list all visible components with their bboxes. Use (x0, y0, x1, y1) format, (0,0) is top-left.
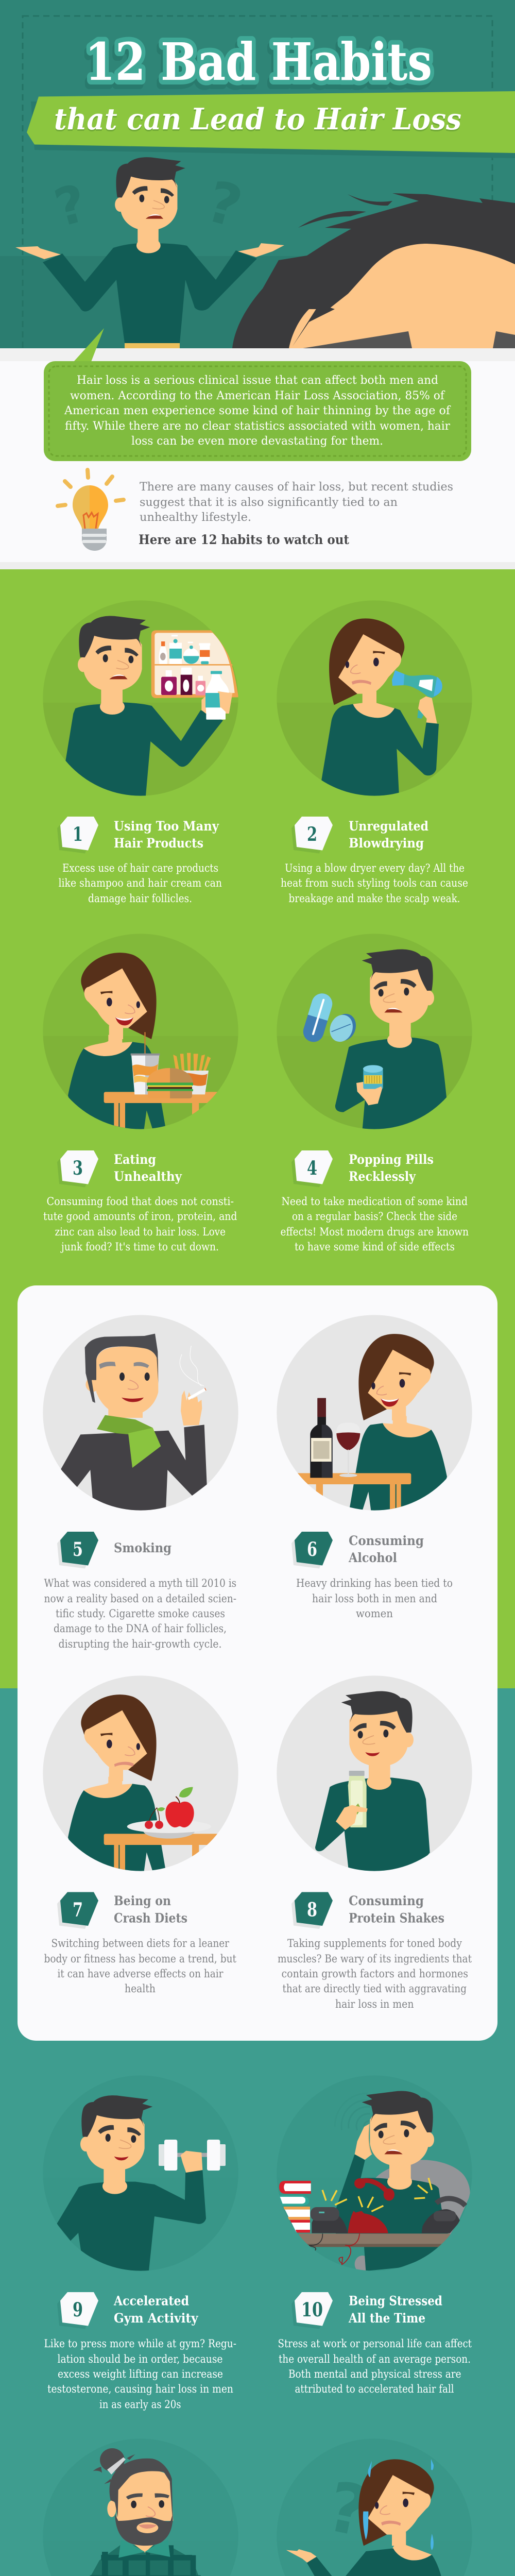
heading: Using Too Many (114, 819, 219, 834)
text (278, 2337, 472, 2395)
heading: Crash Diets (114, 1910, 187, 1926)
heading: Recklessly (349, 1169, 416, 1184)
text (44, 1577, 236, 1650)
card 8 (277, 1675, 472, 2010)
text: Need to take medication of some kind (281, 1195, 468, 1208)
heading (349, 819, 428, 851)
illustration: man with pills (277, 934, 472, 1129)
heading: Consuming (349, 1893, 424, 1908)
badge 7 (57, 1892, 98, 1929)
badge 9 (57, 2292, 98, 2329)
card 4 (277, 934, 472, 1253)
illustration: woman eating fast food (43, 934, 238, 1131)
callout: intro speech bubble: loss can be even more devastating for them. (131, 435, 383, 448)
text: the overall health of an average person. (279, 2353, 471, 2365)
callout: intro speech bubble: American men experience some kind of hair thinning by the age of (64, 404, 451, 417)
card 9 (43, 2075, 238, 2411)
badge 1: 1 (73, 823, 83, 845)
text: Taking supplements for toned body (287, 1937, 462, 1950)
subtitle banner: that can Lead to Hair Loss (54, 102, 461, 137)
heading: Smoking (114, 1540, 171, 1555)
heading (348, 1533, 424, 1565)
text: intro note: unhealthy lifestyle. (140, 511, 251, 524)
text (43, 1195, 237, 1253)
text (44, 2337, 236, 2411)
callout: intro speech bubble (44, 328, 471, 461)
illustration: woman with wet hair: ? (320, 2467, 376, 2553)
text: Stress at work or personal life can affect (278, 2337, 472, 2350)
illustration: woman blowdrying (277, 600, 472, 796)
text: to have some kind of side effects (295, 1241, 455, 1253)
text: now a reality based on a detailed scien- (44, 1592, 236, 1605)
badge 3 (57, 1150, 98, 1187)
text: lation should be in order, because (58, 2353, 222, 2365)
badge 10: 10 (301, 2298, 323, 2321)
illustration: woman on crash diet (43, 1675, 238, 1873)
title: 12 Bad Habits (83, 36, 430, 97)
badge 2: 2 (307, 823, 317, 845)
card 11 (43, 2438, 238, 2576)
heading: All the Time (348, 2311, 425, 2326)
heading: Hair Products (114, 836, 203, 851)
text: zinc can also lead to hair loss. Love (55, 1226, 226, 1238)
text: attributed to accelerated hair fall (295, 2383, 454, 2395)
illustration: woman with wine (277, 1315, 472, 1512)
heading: Blowdrying (349, 836, 424, 851)
panel: green background (0, 569, 515, 1688)
card 3 (43, 934, 238, 1253)
text: in as early as 20s (99, 2398, 181, 2411)
text: contain growth factors and hormones (281, 1968, 468, 1980)
heading: Being Stressed (349, 2294, 442, 2308)
text: intro note: suggest that it is also significantly tied to an (140, 496, 398, 509)
text: on a regular basis? Check the side (292, 1210, 457, 1223)
text: that are directly tied with aggravating (282, 1982, 467, 1995)
text: intro note: There are many causes of hair loss, but recent studies (140, 481, 453, 494)
callout: intro speech bubble: Hair loss is a serious clinical issue that can affect both men and (77, 374, 438, 387)
text: breakage and make the scalp weak. (288, 892, 460, 905)
icon: question marks: ? (200, 168, 249, 241)
badge 8 (291, 1892, 333, 1929)
heading: Unregulated (349, 819, 428, 834)
badge 10 (291, 2292, 333, 2329)
text (44, 1937, 236, 1995)
badge 6 (291, 1532, 333, 1568)
badge 7: 7 (73, 1898, 83, 1921)
heading: Consuming (349, 1533, 424, 1548)
heading: Gym Activity (114, 2311, 199, 2326)
text (281, 862, 468, 905)
badge 2 (291, 817, 333, 853)
text: effects! Most modern drugs are known (280, 1226, 469, 1238)
text (280, 1195, 469, 1253)
badge 3: 3 (73, 1157, 83, 1179)
text: health (125, 1982, 156, 1995)
text (278, 1937, 472, 2010)
heading: Unhealthy (114, 1169, 182, 1184)
text: like shampoo and hair cream can (59, 877, 222, 889)
text: Like to press more while at gym? Regu- (44, 2337, 236, 2350)
text (296, 1577, 453, 1620)
text: excess weight lifting can increase (58, 2368, 223, 2380)
illustration: confused man (15, 157, 284, 348)
heading (348, 2294, 442, 2326)
card 10 (277, 2075, 472, 2395)
card 7 (43, 1675, 238, 1995)
heading: Being on (114, 1893, 171, 1908)
badge 5 (57, 1532, 98, 1568)
text: damage to the DNA of hair follicles, (54, 1622, 227, 1635)
heading: Eating (114, 1152, 156, 1167)
illustration: stressed man with phones (277, 2075, 472, 2273)
title: 12 Bad Habits (85, 31, 432, 92)
badge 4: 4 (307, 1157, 317, 1179)
badge 6: 6 (307, 1538, 317, 1561)
heading (349, 1152, 434, 1184)
panel: header (0, 0, 515, 377)
illustration: large head (232, 193, 515, 348)
card 2 (277, 600, 472, 905)
text: Both mental and physical stress are (288, 2368, 461, 2380)
text: Switching between diets for a leaner (52, 1937, 230, 1950)
icon: light bulb (58, 470, 124, 551)
badge 9: 9 (73, 2298, 83, 2321)
text: tute good amounts of iron, protein, and (43, 1210, 237, 1223)
card 6 (277, 1315, 472, 1620)
illustration: man lifting dumbbell (43, 2075, 238, 2271)
heading: here are 12 habits: Here are 12 habits to watch out (139, 532, 349, 547)
text: disrupting the hair-growth cycle. (59, 1638, 221, 1650)
heading (113, 2294, 199, 2326)
illustration: smoker (43, 1315, 238, 1511)
heading: Popping Pills (349, 1152, 434, 1167)
callout: intro speech bubble: fifty. While there are no clear statistics associated with women, hair (65, 420, 450, 433)
heading: Accelerated (113, 2294, 189, 2308)
text: muscles? Be wary of its ingredients that (278, 1953, 472, 1965)
text: damage hair follicles. (88, 892, 192, 905)
heading: Protein Shakes (349, 1910, 444, 1926)
heading (114, 1152, 182, 1184)
heading (349, 1893, 444, 1926)
badge 4 (291, 1150, 333, 1187)
icon: question marks (55, 181, 240, 225)
panel: intro (0, 328, 515, 569)
heading (114, 1893, 187, 1926)
text: Using a blow dryer every day? All the (285, 862, 465, 874)
panel: white card background (18, 1285, 497, 2041)
card 12 (277, 2438, 472, 2576)
panel: teal background (0, 1688, 515, 2576)
heading (114, 819, 219, 851)
text: What was considered a myth till 2010 is (44, 1577, 236, 1589)
illustration: woman with wet hair (277, 2438, 472, 2576)
text: intro note (140, 481, 453, 524)
text: testosterone, causing hair loss in men (47, 2383, 233, 2395)
text: tific study. Cigarette smoke causes (56, 1607, 225, 1620)
text: Consuming food that does not consti- (46, 1195, 234, 1208)
illustration: man with bun (43, 2438, 238, 2576)
text: Excess use of hair care products (62, 862, 218, 874)
badge 1 (57, 817, 98, 853)
text (59, 862, 222, 905)
text: body or fitness has become a trend, but (44, 1953, 236, 1965)
text: hair loss both in men and (312, 1592, 437, 1605)
text: women (356, 1607, 393, 1620)
illustration: man with protein shake (277, 1675, 472, 1871)
text: it can have adverse effects on hair (58, 1968, 224, 1980)
text: junk food? It's time to cut down. (60, 1241, 219, 1253)
heading: Alcohol (348, 1550, 397, 1565)
illustration: man with cabinet (43, 600, 238, 796)
text: Heavy drinking has been tied to (296, 1577, 453, 1589)
card 5 (43, 1315, 238, 1650)
callout: intro speech bubble: women. According to the American Hair Loss Association, 85% of (70, 389, 445, 402)
text: hair loss in men (335, 1998, 414, 2010)
subtitle banner: that can Lead to Hair Loss (54, 104, 461, 138)
title: 12 Bad Habits (85, 31, 432, 92)
badge 8: 8 (307, 1898, 317, 1921)
badge 5: 5 (73, 1538, 83, 1561)
icon: question marks: ? (48, 173, 93, 239)
subtitle banner (27, 91, 515, 158)
card 1 (43, 600, 238, 905)
text: heat from such styling tools can cause (281, 877, 468, 889)
